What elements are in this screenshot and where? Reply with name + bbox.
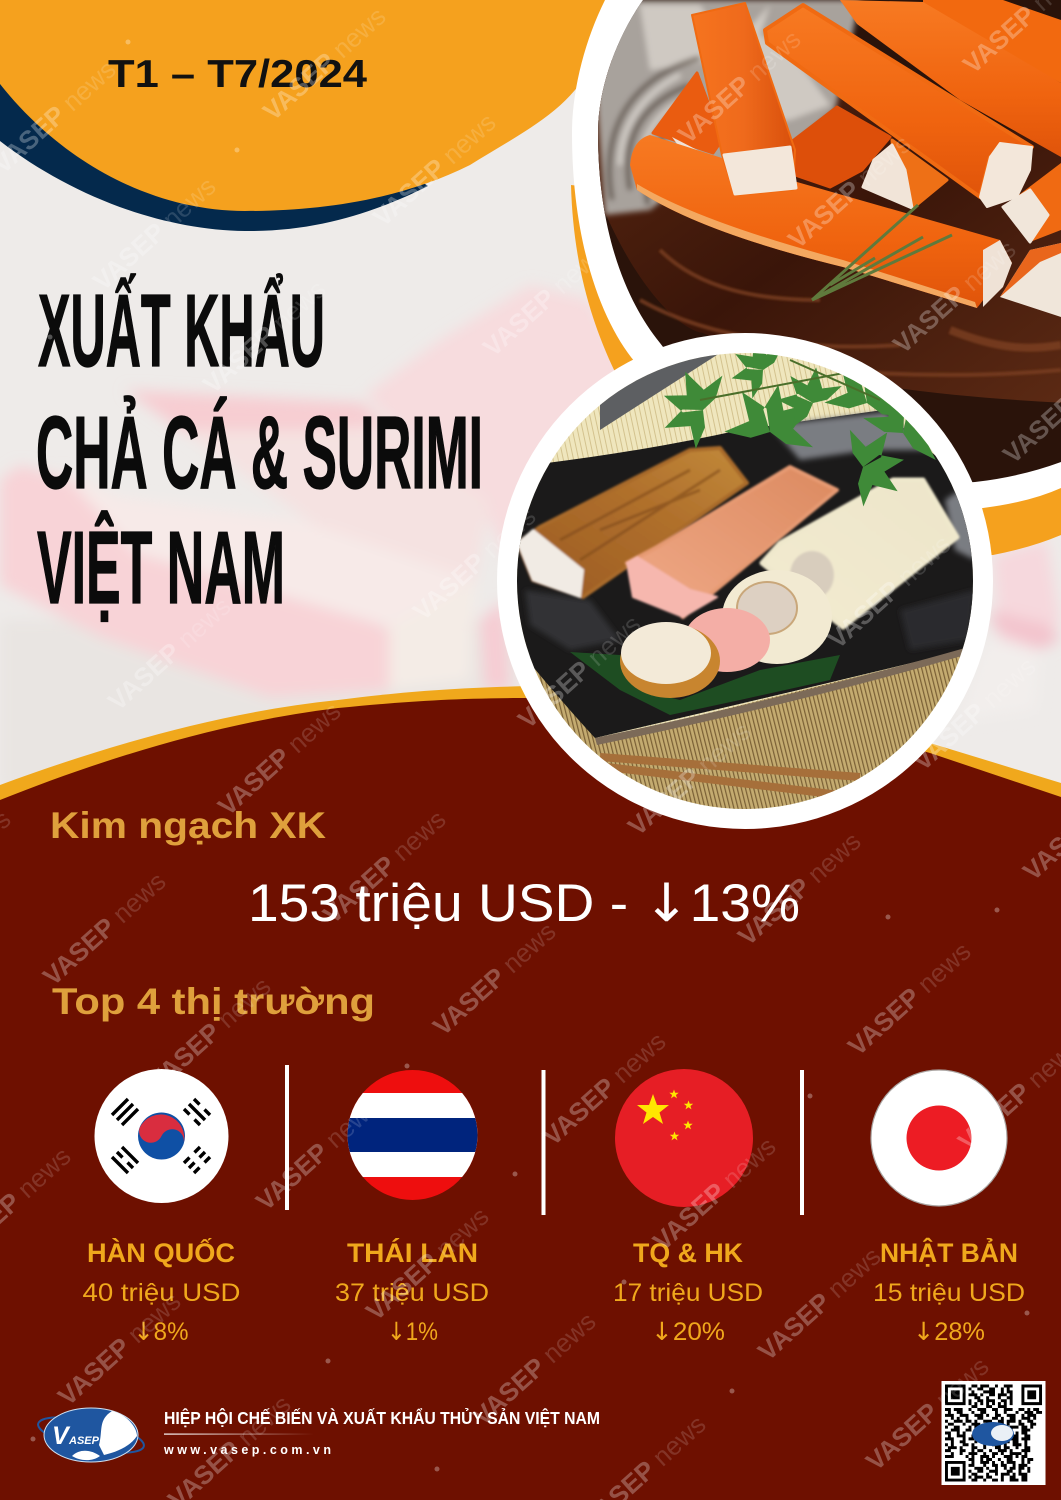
maroon bottom panel with orange edge bbox=[0, 686, 1061, 1500]
VASEP news watermarks: VASEP news bbox=[407, 501, 542, 626]
wood board top and rim bbox=[590, 60, 1061, 403]
VASEP news watermarks: VASEP news bbox=[752, 1241, 887, 1366]
name: TQ & HK bbox=[633, 1238, 743, 1268]
VASEP news watermarks: VASEP news bbox=[842, 936, 977, 1061]
VASEP news watermarks: VASEP news bbox=[907, 651, 1042, 776]
market: Thailand bbox=[335, 1070, 489, 1346]
change: ↓8% bbox=[134, 1317, 188, 1346]
name: HÀN QUỐC bbox=[87, 1236, 235, 1268]
wood grain highlights bbox=[640, 250, 1061, 375]
value: 15 triệu USD bbox=[873, 1279, 1025, 1307]
VASEP news watermarks: VASEP news bbox=[367, 107, 502, 232]
main title bbox=[36, 273, 483, 625]
large stick cream end bbox=[980, 143, 1032, 207]
VASEP news watermarks: VASEP news bbox=[142, 971, 277, 1096]
footer: website: www.vasep.com.vn bbox=[163, 1443, 331, 1457]
header: navy swoosh bbox=[0, 84, 428, 231]
flag: Japan bbox=[871, 1070, 1007, 1206]
VASEP news watermarks: VASEP news bbox=[102, 591, 237, 716]
flag: South Korea bbox=[94, 1069, 228, 1203]
name: THÁI LAN bbox=[347, 1237, 478, 1268]
change: ↓28% bbox=[913, 1317, 985, 1346]
VASEP news watermarks: VASEP news bbox=[672, 24, 807, 149]
orange ring behind top photo bbox=[571, 185, 1061, 560]
grey corner behind mat bbox=[600, 353, 720, 430]
right cream sticks bbox=[1000, 163, 1061, 317]
VASEP news watermarks: VASEP news bbox=[250, 1091, 385, 1216]
footer: VASEP logo: V bbox=[52, 1422, 71, 1450]
maple leaves bbox=[664, 353, 936, 506]
scalloped slice bbox=[620, 622, 720, 698]
market: South Korea bbox=[82, 1069, 240, 1346]
VASEP news watermarks: VASEP news bbox=[477, 237, 612, 362]
market: China and Hong Kong bbox=[613, 1069, 763, 1346]
white ring of top photo bbox=[572, 0, 1061, 510]
black plate bbox=[515, 410, 978, 738]
VASEP news watermarks: VASEP news bbox=[622, 716, 757, 841]
VASEP news watermarks: VASEP news bbox=[360, 1201, 495, 1326]
stick with cream end bbox=[863, 140, 947, 208]
VASEP news watermarks: VASEP news bbox=[257, 1, 392, 126]
VASEP news watermarks: VASEP news bbox=[860, 1351, 995, 1476]
heading: top 4 markets: Top 4 thị trường bbox=[52, 981, 375, 1022]
VASEP news watermarks: VASEP news bbox=[212, 696, 347, 821]
value: 40 triệu USD bbox=[82, 1279, 240, 1307]
small stick behind bbox=[653, 73, 722, 153]
change: ↓1% bbox=[387, 1317, 438, 1346]
VASEP news watermarks: VASEP news bbox=[512, 609, 647, 734]
brown roll bbox=[518, 448, 747, 597]
pink roll bbox=[627, 467, 837, 617]
market divider lines bbox=[285, 1065, 804, 1215]
VASEP news watermarks: VASEP news bbox=[782, 129, 917, 254]
pink slice bbox=[684, 608, 770, 672]
VASEP news watermarks: VASEP news bbox=[732, 826, 867, 951]
date label: T1 – T7/2024 bbox=[108, 53, 367, 96]
far sticks at top right bbox=[923, 0, 1061, 83]
VASEP news watermarks: VASEP news bbox=[467, 1306, 602, 1431]
white roll bbox=[762, 480, 957, 627]
large diagonal stick bbox=[765, 5, 1032, 197]
VASEP news watermarks: VASEP news bbox=[822, 529, 957, 654]
VASEP news watermarks: VASEP news bbox=[317, 804, 452, 929]
shiso leaves under slices bbox=[570, 652, 840, 715]
photo: crab sticks on wooden board bbox=[590, 0, 1061, 490]
QR code bbox=[942, 1381, 1046, 1485]
VASEP news watermarks: VASEP news bbox=[52, 1286, 187, 1411]
VASEP news watermarks: VASEP news bbox=[887, 234, 1022, 359]
flag: Thailand bbox=[347, 1070, 478, 1200]
heading: export value: Kim ngạch XK bbox=[50, 805, 326, 846]
VASEP news watermarks: VASEP news bbox=[197, 274, 332, 399]
long front stick bbox=[630, 135, 1012, 308]
VASEP news watermarks: VASEP news bbox=[427, 916, 562, 1041]
plate rim bbox=[595, 648, 965, 745]
plate highlights bbox=[525, 412, 975, 650]
footer: underline bbox=[164, 1434, 314, 1435]
chopsticks bbox=[600, 757, 860, 795]
QR centre logo bbox=[972, 1422, 1014, 1446]
upright stick bbox=[692, 3, 795, 195]
footer: VASEP logo: ASEP bbox=[68, 1435, 100, 1447]
rosemary sprig bbox=[812, 205, 952, 300]
value: 17 triệu USD bbox=[613, 1279, 763, 1307]
value: 37 triệu USD bbox=[335, 1279, 489, 1307]
change: ↓20% bbox=[651, 1317, 725, 1346]
flag: China bbox=[615, 1069, 753, 1207]
footer: VASEP logo bbox=[35, 1408, 147, 1462]
photo: kamaboko fish cakes on black plate bbox=[517, 353, 973, 809]
main title: CHẢ CÁ & SURIMI bbox=[36, 395, 483, 510]
export value figure: 153 triệu USD - ↓13% bbox=[248, 873, 800, 934]
white slice bbox=[722, 570, 832, 664]
footer: association name: HIỆP HỘI CHẾ BIẾN VÀ XUẤT KHẨU THỦY SẢN VIỆT NAM bbox=[164, 1407, 600, 1428]
main title: XUẤT KHẨU bbox=[38, 273, 325, 388]
main title: VIỆT NAM bbox=[37, 510, 285, 625]
header: orange curved banner bbox=[0, 0, 640, 211]
white ring of round photo bbox=[497, 333, 993, 829]
VASEP news watermarks: VASEP news bbox=[537, 1026, 672, 1151]
market: Japan bbox=[871, 1070, 1025, 1346]
VASEP news watermarks: VASEP news bbox=[87, 171, 222, 296]
name: NHẬT BẢN bbox=[880, 1236, 1018, 1268]
lower bamboo mat bbox=[534, 651, 962, 809]
VASEP news watermarks: VASEP news bbox=[647, 1131, 782, 1256]
swirled grey plate surface bbox=[590, 0, 860, 215]
middle short stick bbox=[790, 107, 890, 187]
VASEP news watermarks: VASEP news bbox=[37, 866, 172, 991]
